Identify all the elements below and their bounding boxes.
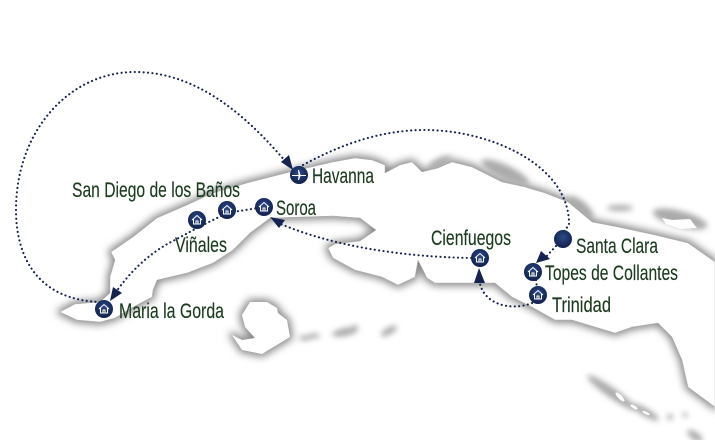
arrow: to Maria la Gorda — [110, 287, 122, 301]
route: Cienfuegos to Soroa — [276, 222, 480, 258]
route: Topes de Collantes to Trinidad — [536, 280, 537, 288]
route: Soroa to Maria la Gorda — [116, 207, 264, 292]
route: flight loop from Havanna around to Maria la Gorda — [16, 72, 286, 302]
marker: Santa Clara — [554, 230, 572, 248]
small white cays — [614, 218, 697, 416]
label: Viñales: Viñales — [175, 233, 227, 257]
arrow: to Topes de Collantes — [536, 251, 550, 263]
label: San Diego de los Baños: San Diego de los Baños — [72, 178, 240, 202]
route: Santa Clara to Topes de Collantes — [545, 246, 556, 258]
label: Santa Clara: Santa Clara — [576, 234, 658, 258]
label: Maria la Gorda: Maria la Gorda — [119, 299, 224, 323]
arrow: to Cienfuegos — [474, 268, 485, 283]
marker: Trinidad — [529, 286, 547, 304]
arrow: to Havanna — [281, 155, 293, 170]
map of Cuba — [60, 153, 715, 440]
marker: Viñales — [188, 211, 206, 229]
marker: Cienfuegos — [471, 249, 489, 267]
land: Isla de la Juventud — [232, 302, 290, 354]
marker: Soroa — [255, 198, 273, 216]
marker: Topes de Collantes — [524, 263, 542, 281]
coast shadow — [60, 158, 715, 407]
route: Trinidad to Cienfuegos — [479, 274, 532, 306]
label: Cienfuegos: Cienfuegos — [431, 226, 511, 250]
label: Soroa: Soroa — [276, 196, 316, 220]
label: Havanna: Havanna — [312, 164, 374, 188]
route: Havanna to Santa Clara — [303, 130, 569, 231]
marker: Havanna airplane — [290, 166, 308, 184]
arrow: to Soroa — [270, 217, 285, 228]
land: main island — [60, 158, 715, 407]
label: Trinidad: Trinidad — [552, 293, 611, 317]
marker: San Diego de los Baños — [218, 201, 236, 219]
northern cays shading — [299, 153, 709, 440]
marker: Maria la Gorda — [95, 300, 113, 318]
